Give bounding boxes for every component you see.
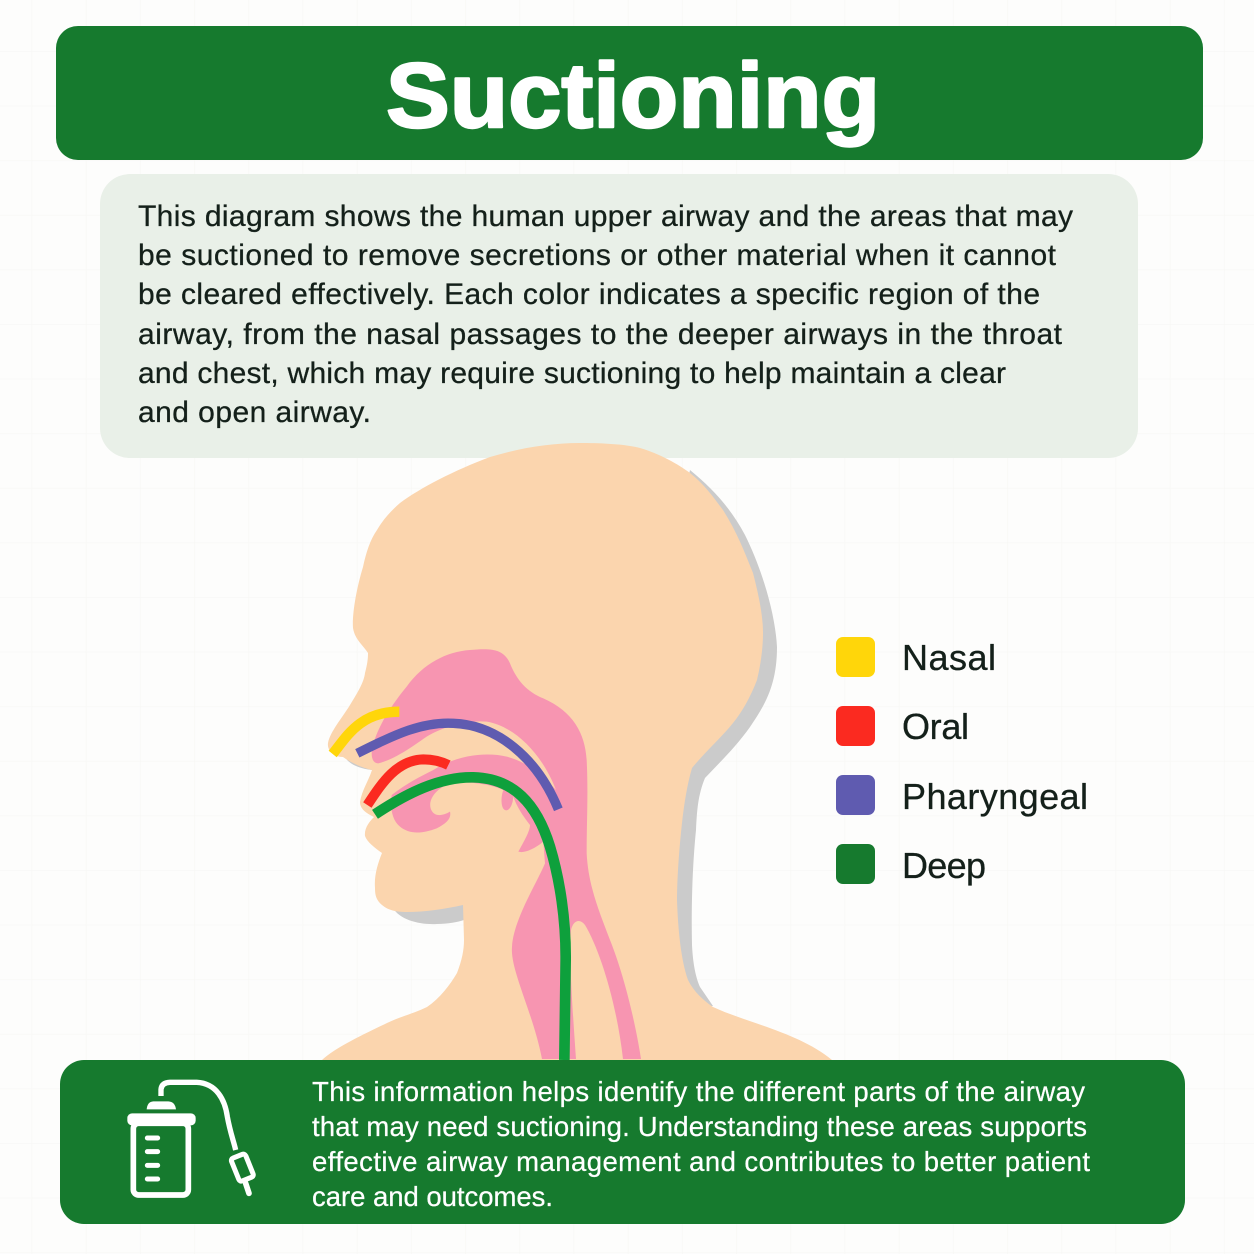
footer panel [60,1060,1185,1224]
head silhouette [322,443,832,1060]
legend: nasal: Nasal [902,637,996,678]
legend [836,637,1088,886]
tube: nasal [333,712,399,754]
panel: introduction [100,174,1138,458]
header banner [56,26,1203,160]
footer text: that may need suctioning. Understanding these areas supports [312,1111,1087,1142]
chin shadow [393,900,465,924]
title: Suctioning [386,45,880,147]
tube: oral [367,759,448,805]
intro text: be suctioned to remove secretions or other material when it cannot [138,239,1057,272]
tube: deep [375,777,566,1060]
legend: oral [836,706,969,747]
icon: suction canister [127,1082,254,1195]
intro text: and chest, which may require suctioning to help maintain a clear [138,357,1006,390]
intro text [138,200,1073,429]
intro text: and open airway. [138,396,371,429]
intro text: This diagram shows the human upper airway and the areas that may [138,200,1073,233]
intro text: be cleared effectively. Each color indicates a specific region of the [138,278,1040,311]
footer text [312,1076,1090,1212]
footer text: care and outcomes. [312,1181,553,1212]
legend: pharyngeal: Pharyngeal [902,776,1088,817]
footer text: This information helps identify the different parts of the airway [312,1076,1085,1107]
footer text: effective airway management and contributes to better patient [312,1146,1090,1177]
legend: deep: Deep [902,845,986,886]
nose shadow [342,748,374,770]
airway diagram [322,443,832,1060]
legend: oral: Oral [902,706,969,747]
legend: deep [836,844,986,886]
intro text: airway, from the nasal passages to the deeper airways in the throat [138,318,1063,351]
legend: nasal [836,637,996,678]
head shadow [640,470,777,1010]
airway passages [333,649,641,1060]
tube: pharyngeal [357,723,558,809]
